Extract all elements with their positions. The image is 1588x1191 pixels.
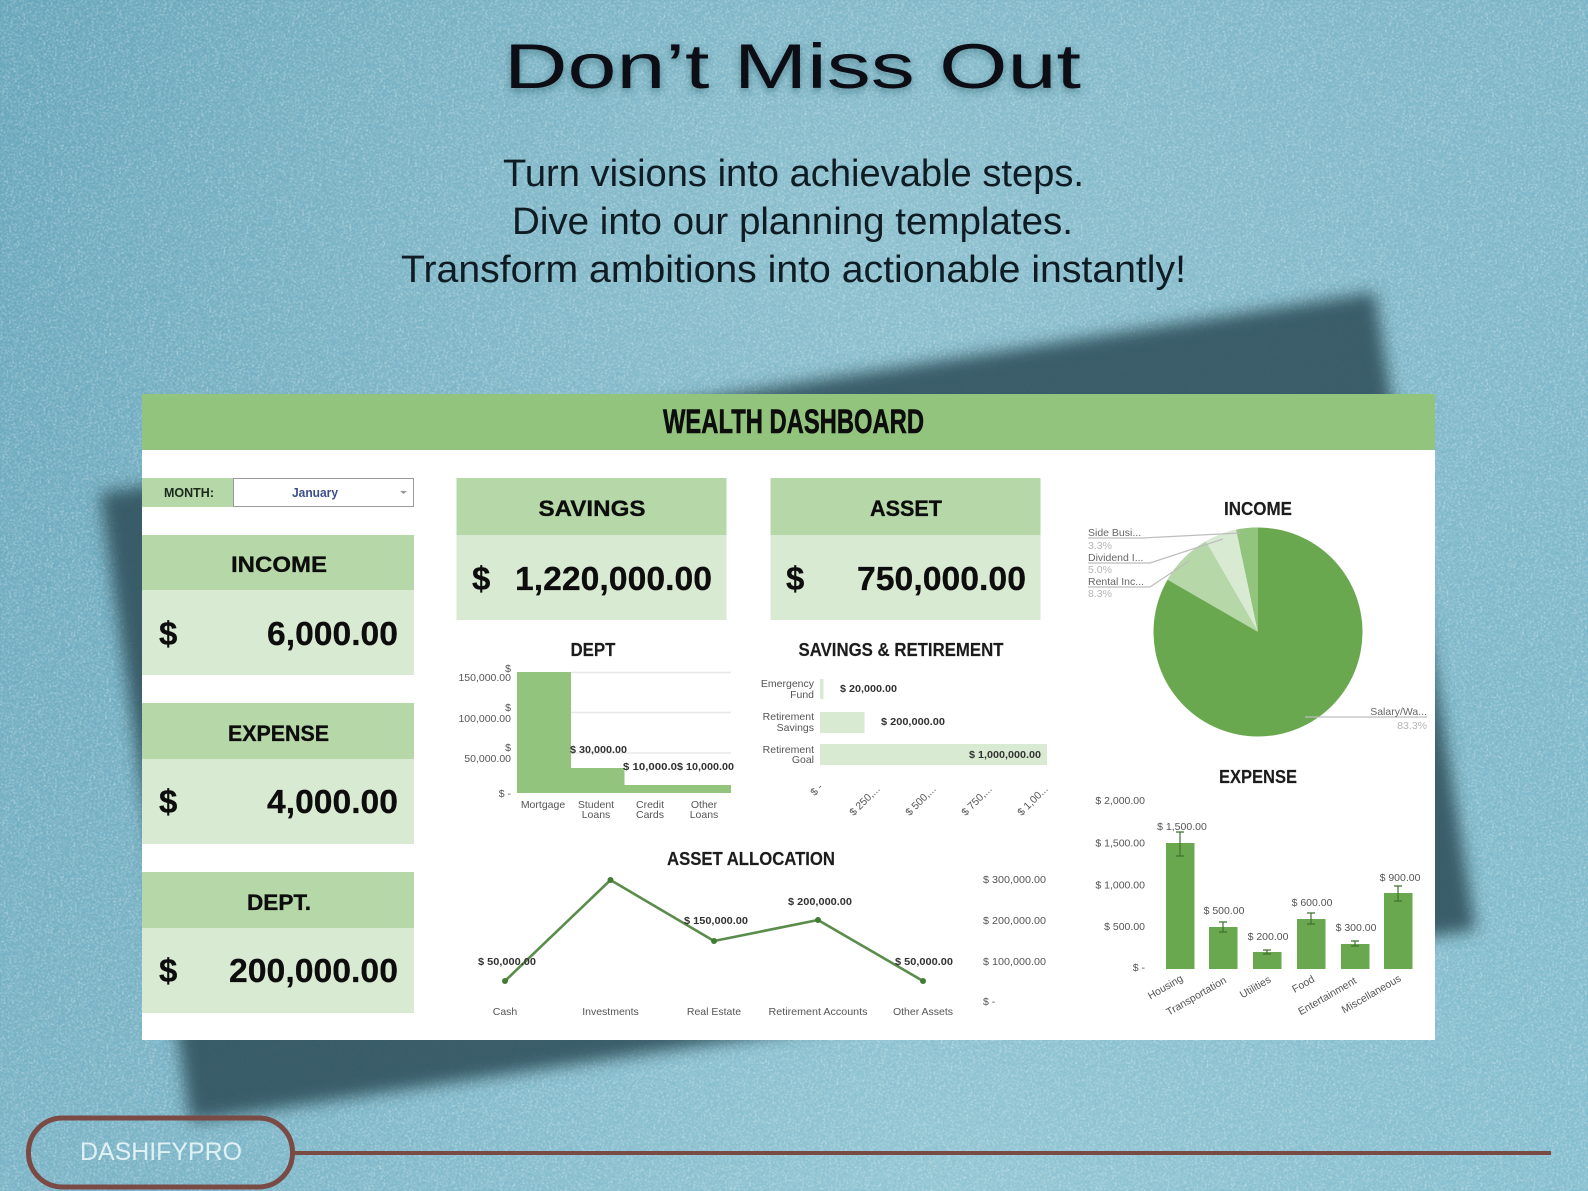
chart: asset allocation line: $ 200,000.00 — [983, 915, 1046, 927]
chart: expense bars: $ 300.00 — [1336, 922, 1377, 934]
chart: expense bars: Housing — [1146, 972, 1185, 1002]
chart: savings and retirement bars: SAVINGS & RETIREMENT — [798, 640, 1004, 660]
panel: income total: INCOME — [231, 552, 327, 577]
chart: expense bars: $ 2,000.00 — [1095, 795, 1145, 807]
chart: expense bars: Miscellaneous — [1340, 973, 1403, 1016]
chart: expense bars — [1095, 767, 1421, 1018]
chart: savings and retirement bars: Goal — [792, 754, 814, 766]
subtitle text block: Transform ambitions into actionable instantly! — [401, 249, 1186, 291]
chart: savings and retirement bars: $ 750,... — [959, 783, 995, 819]
chart: income pie: Salary/Wa... — [1370, 706, 1427, 718]
panel: expense total: EXPENSE — [228, 721, 329, 746]
chart: dept bars: Student — [578, 799, 614, 811]
subtitle text block: Dive into our planning templates. — [512, 201, 1073, 243]
chart: dept bars — [458, 640, 734, 821]
chart: dept bars: $ - — [499, 788, 511, 800]
chart: asset allocation line: Retirement Accounts — [768, 1006, 868, 1018]
chart: income pie: 5.0% — [1088, 564, 1112, 576]
panel: asset total — [770, 478, 1040, 620]
chart: savings and retirement bars: Fund — [790, 689, 814, 701]
panel: expense total: $ — [159, 783, 177, 820]
footer rule — [293, 1151, 1551, 1155]
chart: asset allocation line — [478, 849, 1046, 1018]
panel: asset total: 750,000.00 — [857, 560, 1026, 597]
panel: wealth dashboard — [142, 394, 1435, 1040]
chart: dept bars: Mortgage — [521, 799, 565, 811]
chart: expense bars: $ 1,500.00 — [1157, 821, 1207, 833]
chart: savings and retirement bars: $ 500,... — [903, 783, 939, 819]
chart: expense bars: $ 1,000.00 — [1095, 880, 1145, 892]
chart: income pie: INCOME — [1224, 499, 1292, 519]
chart: expense bars: $ 200.00 — [1248, 931, 1289, 943]
chart: savings and retirement bars: $ - — [808, 781, 826, 798]
chart: savings and retirement bars — [761, 640, 1051, 819]
chart: savings and retirement bars: Emergency — [761, 678, 815, 690]
subtitle text block — [401, 153, 1186, 291]
subtitle text block: Turn visions into achievable steps. — [503, 153, 1084, 195]
chart: income pie — [1088, 499, 1427, 736]
footer brand pill: DASHIFYPRO — [80, 1138, 242, 1166]
dashboard drop shadow — [100, 292, 1476, 1122]
chart: dept bars: Loans — [582, 809, 610, 821]
chart: income pie: Rental Inc... — [1088, 576, 1144, 588]
chart: savings and retirement bars: Retirement — [763, 711, 814, 723]
chart: expense bars: Food — [1290, 973, 1317, 996]
chart: dept bars: $ 10,000.0 — [623, 761, 677, 773]
chart: savings and retirement bars: $ 1,000,000.00 — [969, 749, 1041, 761]
chart: expense bars: Utilities — [1238, 974, 1273, 1001]
chart: dept bars: $ 30,000.00 — [570, 744, 627, 756]
chart: dept bars: Credit — [636, 799, 664, 811]
chart: dept bars: Other — [691, 799, 718, 811]
panel: dept total: DEPT. — [247, 890, 311, 915]
dashboard header: WEALTH DASHBOARD — [663, 403, 924, 441]
chart: expense bars: $ 1,500.00 — [1095, 838, 1145, 850]
chart: dept bars: $ — [505, 702, 511, 714]
month selector — [142, 478, 414, 507]
chart: expense bars: $ 500.00 — [1104, 921, 1145, 933]
panel: expense total — [142, 703, 414, 844]
chart: dept bars: $ — [505, 742, 511, 754]
chart: asset allocation line: $ 150,000.00 — [684, 915, 748, 927]
chart: dept bars: Cards — [636, 809, 664, 821]
chart: income pie: 8.3% — [1088, 588, 1112, 600]
month selector: MONTH: — [164, 485, 214, 500]
month selector: January — [292, 485, 339, 500]
chart: savings and retirement bars: Savings — [777, 722, 814, 734]
chart: expense bars: $ 900.00 — [1380, 872, 1421, 884]
chart: dept bars: $ — [505, 663, 511, 675]
chart: asset allocation line: $ - — [983, 996, 996, 1008]
chart: income pie: Side Busi... — [1088, 527, 1141, 539]
chart: dept bars: DEPT — [570, 640, 616, 660]
panel: expense total: 4,000.00 — [267, 783, 398, 820]
chart: dept bars: 100,000.00 — [458, 713, 511, 725]
title: Don’t Miss Out — [504, 32, 1082, 102]
chart: asset allocation line: Other Assets — [893, 1006, 953, 1018]
chart: income pie: 3.3% — [1088, 540, 1112, 552]
panel: dept total: 200,000.00 — [229, 952, 398, 989]
chart: income pie: 83.3% — [1397, 720, 1427, 732]
chart: asset allocation line: $ 50,000.00 — [478, 956, 536, 968]
chart: expense bars: $ 600.00 — [1292, 897, 1333, 909]
panel: asset total: ASSET — [870, 496, 943, 521]
chart: savings and retirement bars: $ 200,000.00 — [881, 716, 945, 728]
dashboard header — [142, 394, 1435, 450]
chart: asset allocation line: Investments — [582, 1006, 639, 1018]
chart: dept bars: Loans — [690, 809, 718, 821]
panel: dept total — [142, 872, 414, 1013]
chart: asset allocation line: $ 100,000.00 — [983, 956, 1046, 968]
chart: asset allocation line: ASSET ALLOCATION — [667, 849, 835, 869]
chart: savings and retirement bars: $ 250,... — [847, 783, 883, 819]
chart: asset allocation line: Cash — [493, 1006, 517, 1018]
panel: income total: 6,000.00 — [267, 615, 398, 652]
chart: expense bars: EXPENSE — [1219, 767, 1297, 787]
panel: savings total: $ — [472, 560, 490, 597]
chart: savings and retirement bars: $ 20,000.00 — [840, 683, 897, 695]
panel: income total: $ — [159, 615, 177, 652]
chart: asset allocation line: $ 300,000.00 — [983, 874, 1046, 886]
footer brand pill — [28, 1118, 292, 1187]
chart: savings and retirement bars: $ 1,00... — [1015, 783, 1051, 819]
chart: dept bars: 150,000.00 — [458, 672, 511, 684]
chart: dept bars: 50,000.00 — [464, 753, 511, 765]
chart: asset allocation line: $ 200,000.00 — [788, 896, 852, 908]
panel: savings total — [456, 478, 726, 620]
chart: savings and retirement bars: Retirement — [763, 744, 814, 756]
chart: expense bars: Entertainment — [1296, 975, 1359, 1018]
panel: asset total: $ — [786, 560, 804, 597]
chart: asset allocation line: $ 50,000.00 — [895, 956, 953, 968]
chart: income pie: Dividend I... — [1088, 552, 1143, 564]
panel: dept total: $ — [159, 952, 177, 989]
chart: expense bars: $ 500.00 — [1204, 905, 1245, 917]
chart: dept bars: $ 10,000.00 — [677, 761, 734, 773]
chart: asset allocation line: Real Estate — [687, 1006, 741, 1018]
panel: income total — [142, 535, 414, 675]
panel: savings total: SAVINGS — [538, 496, 646, 521]
chart: expense bars: $ - — [1133, 962, 1145, 974]
panel: savings total: 1,220,000.00 — [515, 560, 712, 597]
chart: expense bars: Transportation — [1164, 974, 1229, 1018]
